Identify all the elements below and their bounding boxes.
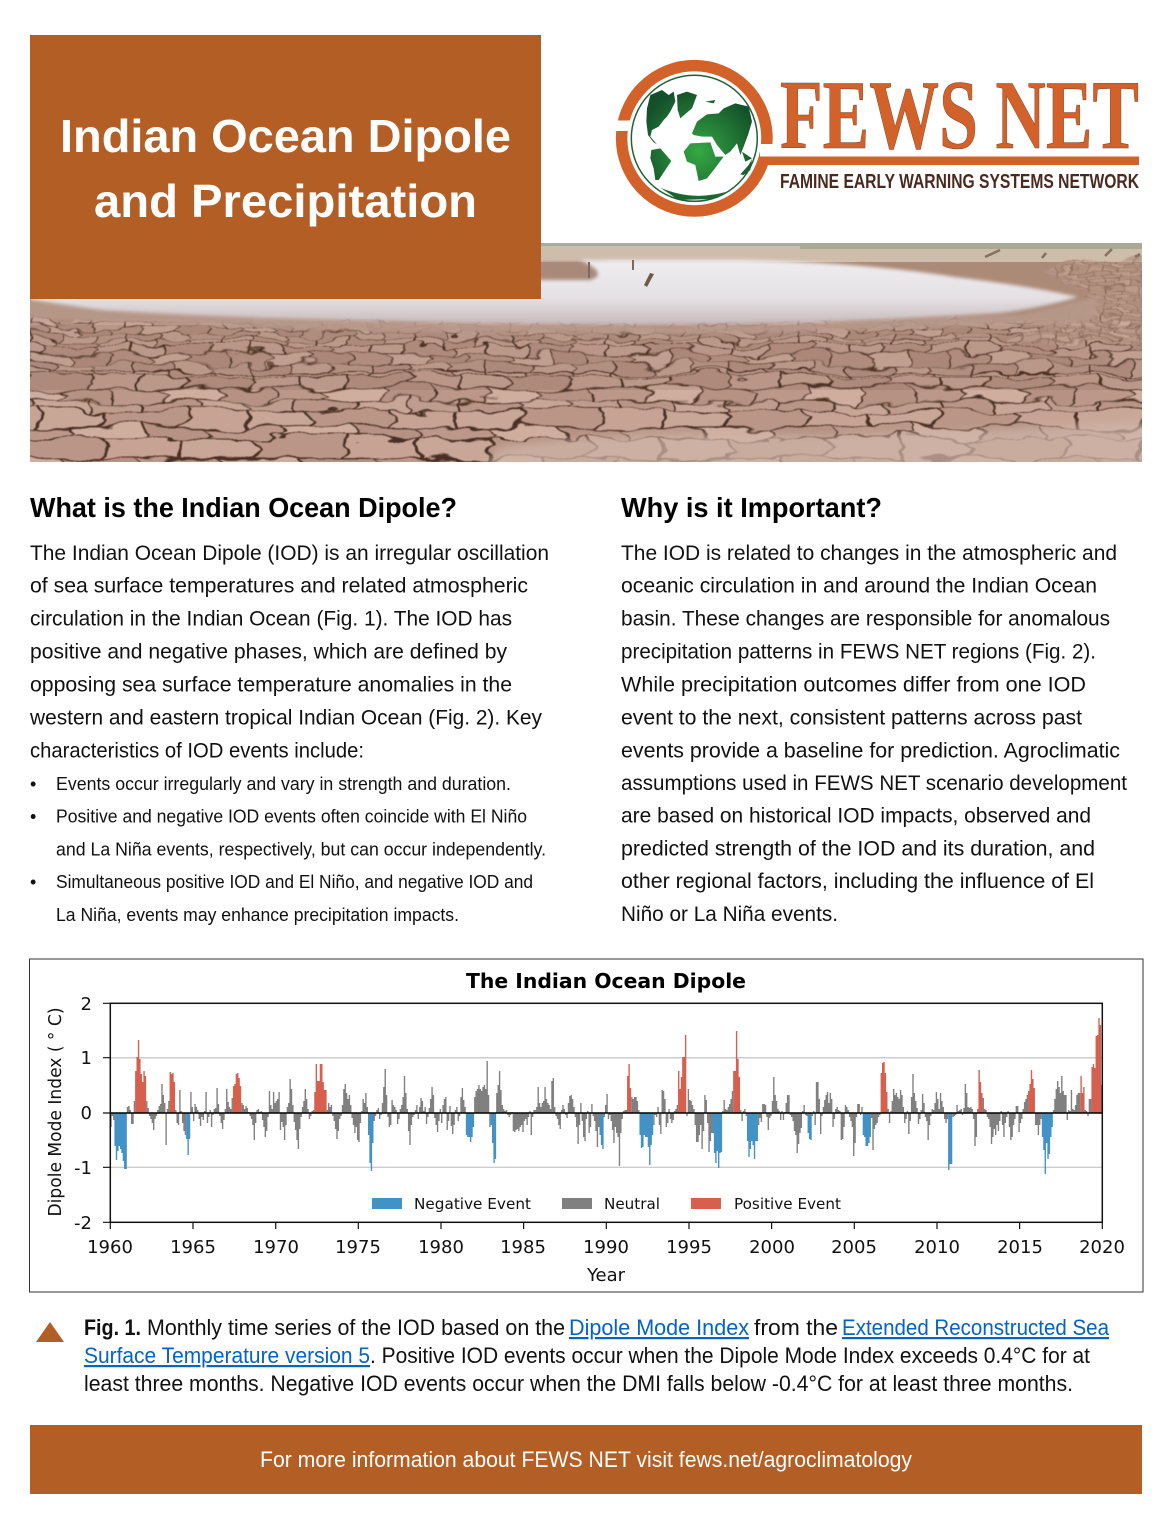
figure caption: Dipole Mode Index bbox=[569, 1315, 749, 1340]
x axis tick labels: 1980 bbox=[418, 1237, 464, 1258]
FEWS NET logo bbox=[612, 61, 1139, 211]
figure caption: Fig. 1. bbox=[84, 1315, 141, 1340]
title block bbox=[30, 35, 541, 299]
body text: events provide a baseline for prediction. Agroclimatic bbox=[621, 739, 1120, 762]
bullet list: Events occur irregularly and vary in strength and duration. bbox=[56, 774, 511, 794]
body text: positive and negative phases, which are defined by bbox=[30, 640, 507, 663]
body text: other regional factors, including the influence of El bbox=[621, 870, 1094, 893]
bullet list: • bbox=[30, 872, 36, 892]
heading: Why is it Important? bbox=[621, 492, 882, 523]
x axis tick labels: 2000 bbox=[749, 1237, 795, 1258]
figure caption: Monthly time series of the IOD based on the bbox=[147, 1315, 565, 1340]
panel: IOD bar chart bbox=[30, 959, 1143, 1292]
neutral bars bbox=[110, 1061, 1091, 1166]
x axis tick labels: 2005 bbox=[831, 1237, 877, 1258]
icon: globe with orange ring bbox=[612, 66, 780, 211]
body text: characteristics of IOD events include: bbox=[30, 739, 364, 762]
x axis title: Year bbox=[586, 1265, 626, 1286]
panel: what is the Indian Ocean Dipole bbox=[29, 492, 549, 925]
figure caption: . Positive IOD events occur when the Dipole Mode Index exceeds 0.4°C for at bbox=[370, 1343, 1090, 1368]
x axis tick labels: 1965 bbox=[170, 1237, 216, 1258]
body text: The Indian Ocean Dipole (IOD) is an irregular oscillation bbox=[30, 542, 549, 565]
x axis tick labels: 1985 bbox=[500, 1237, 546, 1258]
body text: precipitation patterns in FEWS NET regions (Fig. 2). bbox=[621, 640, 1096, 663]
axis ticks bbox=[103, 1003, 1102, 1229]
x axis tick labels: 1990 bbox=[583, 1237, 629, 1258]
figure caption: from the bbox=[754, 1315, 838, 1340]
bullet list: Simultaneous positive IOD and El Niño, and negative IOD and bbox=[56, 872, 533, 892]
bullet list: • bbox=[30, 806, 36, 826]
y axis tick labels: -1 bbox=[74, 1158, 92, 1179]
y axis title: Dipole Mode Index ( ° C) bbox=[45, 1008, 66, 1216]
y axis tick labels: -2 bbox=[74, 1213, 92, 1234]
footer banner: For more information about FEWS NET visit fews.net/agroclimatology bbox=[260, 1447, 912, 1472]
title block: and Precipitation bbox=[94, 175, 477, 227]
icon: caption triangle bbox=[36, 1322, 64, 1342]
positive event bars bbox=[135, 1018, 1102, 1113]
body text bbox=[621, 542, 1127, 926]
bullet list: Positive and negative IOD events often coincide with El Niño bbox=[56, 806, 527, 826]
body text: of sea surface temperatures and related atmospheric bbox=[30, 574, 528, 597]
x axis tick labels bbox=[87, 1237, 1125, 1258]
bullet list: • bbox=[30, 774, 36, 794]
bullet list: La Niña, events may enhance precipitation impacts. bbox=[56, 905, 459, 925]
hero photo: cracked dry earth and shrinking water bbox=[30, 243, 1142, 462]
body text: While precipitation outcomes differ from one IOD bbox=[621, 673, 1086, 696]
y axis tick labels: 2 bbox=[81, 994, 92, 1015]
footer banner bbox=[30, 1425, 1142, 1494]
y axis tick labels: 0 bbox=[81, 1103, 92, 1124]
figure caption: Surface Temperature version 5 bbox=[84, 1343, 370, 1368]
x axis tick labels: 2015 bbox=[997, 1237, 1043, 1258]
body text: are based on historical IOD impacts, observed and bbox=[621, 804, 1091, 828]
negative event bars bbox=[114, 1113, 1053, 1174]
legend: Neutral bbox=[604, 1195, 660, 1213]
title block: Indian Ocean Dipole bbox=[60, 110, 511, 162]
body text: opposing sea surface temperature anomalies in the bbox=[30, 673, 512, 696]
body text: event to the next, consistent patterns across past bbox=[621, 706, 1082, 729]
y axis tick labels bbox=[74, 994, 92, 1234]
body text: circulation in the Indian Ocean (Fig. 1). The IOD has bbox=[30, 607, 512, 630]
legend bbox=[372, 1195, 841, 1213]
y axis tick labels: 1 bbox=[81, 1048, 92, 1069]
body text: assumptions used in FEWS NET scenario development bbox=[621, 772, 1127, 795]
x axis tick labels: 1970 bbox=[253, 1237, 299, 1258]
body text: basin. These changes are responsible for anomalous bbox=[621, 607, 1110, 630]
x axis tick labels: 1975 bbox=[335, 1237, 381, 1258]
bullet list: and La Niña events, respectively, but can occur independently. bbox=[56, 840, 546, 860]
heading: What is the Indian Ocean Dipole? bbox=[30, 492, 457, 523]
x axis tick labels: 2010 bbox=[914, 1237, 960, 1258]
x axis tick labels: 1995 bbox=[666, 1237, 712, 1258]
chart title: The Indian Ocean Dipole bbox=[466, 969, 746, 993]
bullet list bbox=[30, 774, 546, 925]
legend: Negative Event bbox=[414, 1195, 531, 1213]
x axis tick labels: 1960 bbox=[87, 1237, 133, 1258]
orange rule bbox=[766, 156, 1139, 165]
body text bbox=[29, 542, 549, 762]
panel: why is it important bbox=[621, 492, 1127, 926]
figure caption bbox=[84, 1315, 1110, 1396]
body text: Niño or La Niña events. bbox=[621, 903, 838, 926]
x axis tick labels: 2020 bbox=[1079, 1237, 1125, 1258]
figure caption: Extended Reconstructed Sea bbox=[842, 1315, 1110, 1340]
body text: predicted strength of the IOD and its duration, and bbox=[621, 838, 1095, 860]
legend: Positive Event bbox=[734, 1195, 841, 1213]
body text: western and eastern tropical Indian Ocean (Fig. 2). Key bbox=[29, 706, 542, 729]
body text: oceanic circulation in and around the Indian Ocean bbox=[621, 574, 1097, 597]
body text: The IOD is related to changes in the atmospheric and bbox=[621, 542, 1117, 565]
figure caption: least three months. Negative IOD events occur when the DMI falls below -0.4°C for at least three months. bbox=[84, 1371, 1073, 1396]
